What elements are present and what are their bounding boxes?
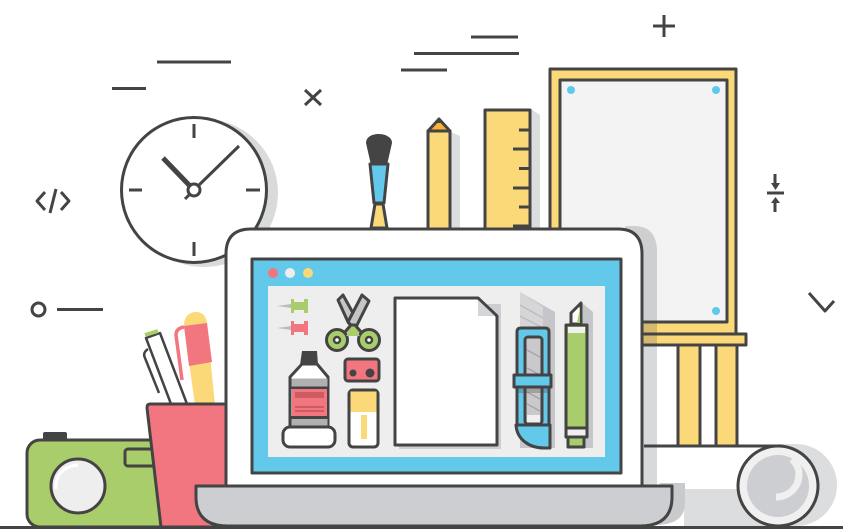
- paper sheet: [395, 298, 501, 449]
- blade: [520, 292, 555, 448]
- roll end: [738, 446, 818, 526]
- icon: plus: [653, 15, 675, 37]
- laptop lid: [226, 229, 642, 486]
- pen cup group: [27, 312, 226, 527]
- pencil: [428, 118, 460, 229]
- pin: red: [277, 321, 308, 335]
- tube label: [292, 389, 327, 416]
- cutter clip: [514, 375, 551, 387]
- clock hands: [163, 158, 190, 186]
- camera: [43, 432, 67, 442]
- easel: [550, 69, 746, 446]
- board pins: [567, 86, 575, 94]
- clock face: [122, 118, 266, 262]
- clock shadow: [130, 119, 278, 267]
- tube cap: [283, 427, 335, 447]
- laptop shadow: [625, 226, 657, 486]
- icon: cross: [305, 90, 321, 105]
- easel legs: [678, 344, 700, 446]
- white pen: [146, 333, 187, 404]
- paper shadow: [399, 304, 501, 449]
- ruler: [485, 109, 540, 229]
- cutter tip: [516, 425, 550, 448]
- camera viewfinder: [125, 449, 159, 466]
- laptop screen: [252, 259, 621, 473]
- easel tray: [642, 334, 746, 345]
- decorative dashes: [57, 37, 519, 310]
- pencil in cup: [184, 312, 215, 405]
- cup: [147, 404, 226, 527]
- laptop base shadow: [640, 483, 685, 525]
- icon: circle: [32, 303, 45, 316]
- roll shadow: [684, 444, 837, 526]
- eraser: [345, 359, 379, 381]
- icon: code brackets: [37, 189, 69, 213]
- paint tube: [283, 351, 335, 447]
- icon: compress arrows: [767, 174, 784, 212]
- laptop: [196, 226, 685, 526]
- pin: green: [277, 299, 308, 313]
- workspace panel: [268, 286, 605, 457]
- window dots: [268, 268, 278, 278]
- icon: chevron: [809, 293, 834, 311]
- cutter knife: [514, 292, 555, 448]
- cutter body: [517, 328, 549, 426]
- glue stick: [349, 390, 378, 447]
- craft knife: [566, 302, 593, 448]
- laptop base: [196, 486, 672, 526]
- camera lens: [51, 459, 105, 513]
- pen cap: [184, 323, 212, 366]
- clock: [122, 118, 278, 267]
- brush: [366, 134, 392, 228]
- scissors: [326, 295, 380, 350]
- easel board: [560, 80, 727, 322]
- ground line: [0, 526, 843, 529]
- easel frame: [550, 69, 736, 334]
- paper roll: [644, 444, 837, 526]
